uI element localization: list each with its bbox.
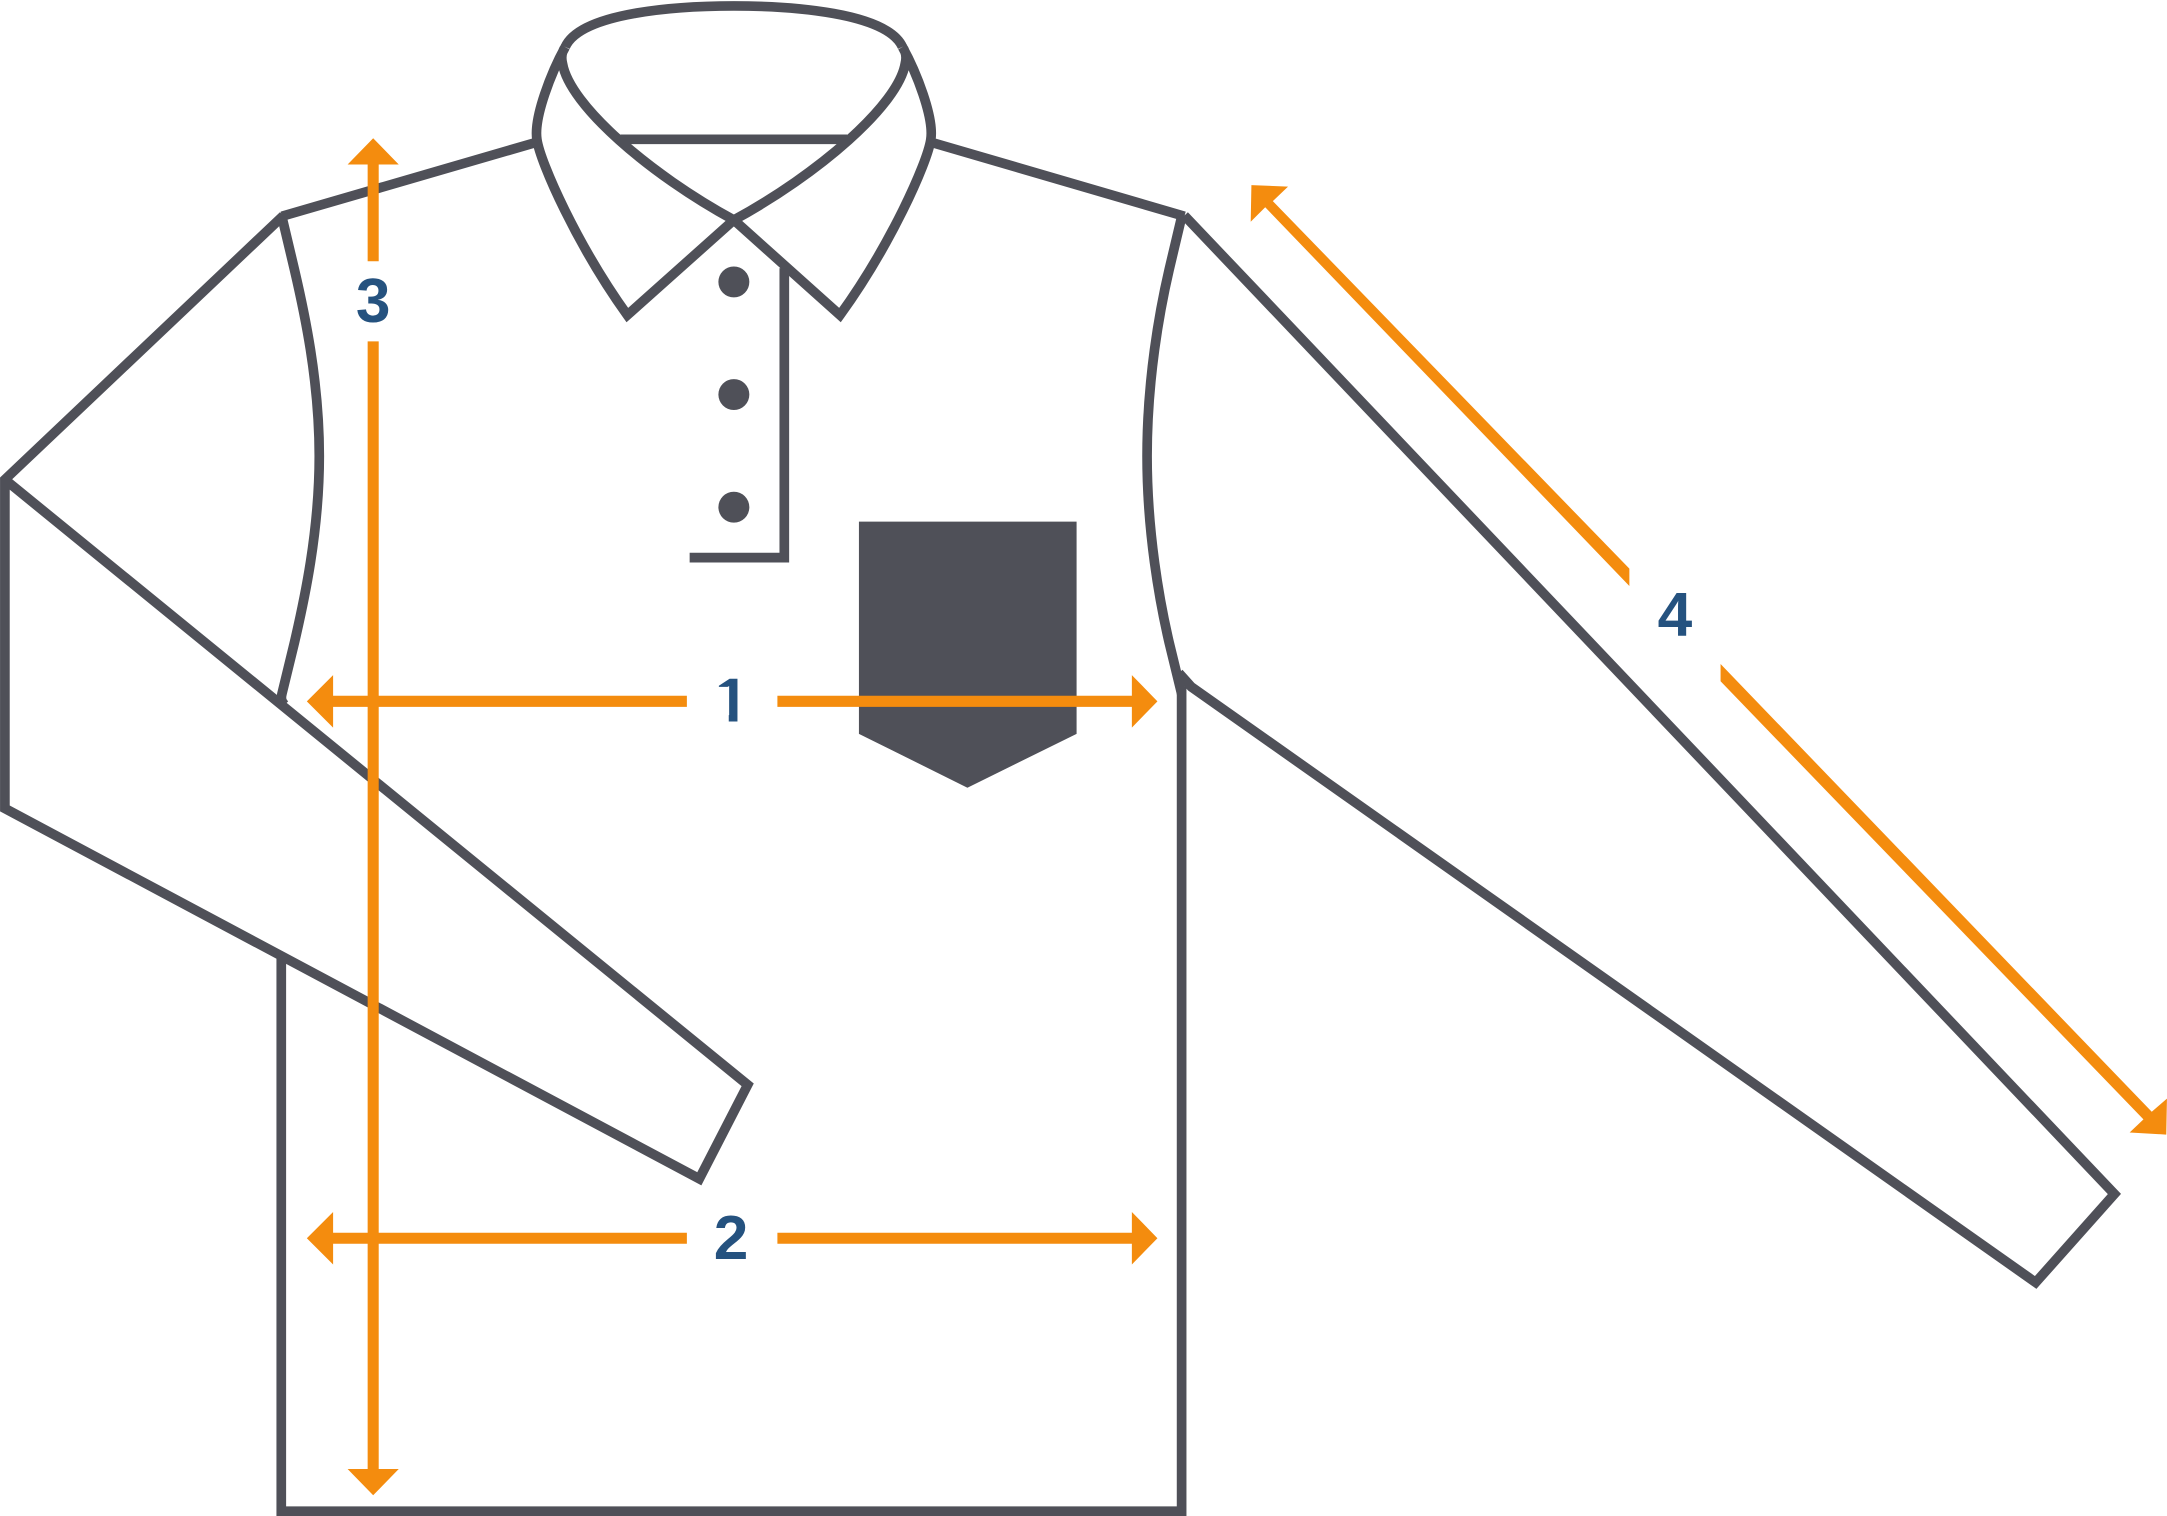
label 4: 4 [1658,581,1693,650]
arrow 2: hem width [307,1212,1157,1264]
left shoulder seam [282,142,536,216]
label 2: 2 [714,1204,748,1273]
chest pocket [859,522,1077,788]
collar right flap [734,47,931,315]
label 3: 3 [356,267,390,336]
shirt body hem and sides [281,687,1182,1511]
right sleeve [1179,216,2114,1282]
right armhole seam [1147,217,1182,694]
right shoulder seam [931,142,1184,216]
neck band line [621,136,847,143]
left sleeve [5,216,748,1179]
arrow 4: sleeve length [1251,185,2167,1135]
collar left flap [537,47,734,315]
collar [537,6,931,315]
arrow 1: chest width [307,675,1157,728]
label 1: 1 [715,666,749,735]
collar neck top arc [565,6,902,47]
arrow 3: body length [348,138,399,1495]
left armhole seam [281,217,319,705]
placket [690,268,784,558]
buttons [718,266,749,523]
